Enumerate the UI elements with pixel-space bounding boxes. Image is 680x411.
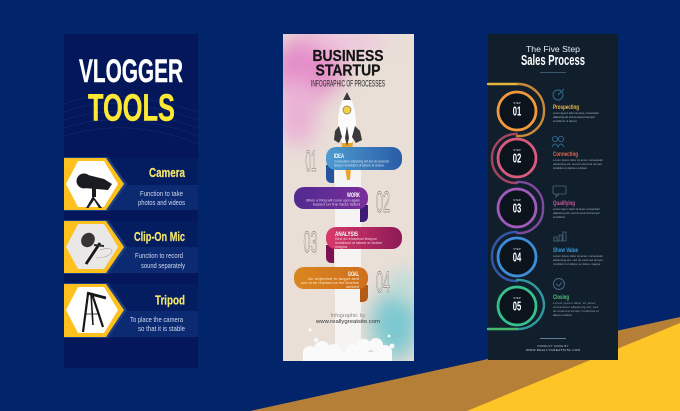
text: connecting: adipiscing elit, sed do eiusmod tempor (553, 162, 602, 166)
panel: vlogger tools (64, 34, 198, 368)
row: clip-on mic: Clip-On Mic (134, 230, 185, 244)
text: qualifying: incididunt (553, 215, 565, 219)
heading: business startup: STARTUP (316, 62, 380, 80)
step 03: analysis: incididunt ut labore et dolore (335, 241, 382, 245)
row: camera: Camera (149, 166, 186, 180)
icon: microphone (78, 230, 112, 264)
step 02: work (294, 187, 368, 222)
icon: target (553, 89, 564, 100)
panel: business startup: 01 (306, 145, 316, 178)
step 04: goal: one to be reached on the timeline (301, 281, 359, 285)
step 01 circle: 01 (513, 104, 521, 118)
panel: business startup: 02 (376, 186, 390, 219)
step 04: goal (294, 267, 368, 302)
row: clip-on mic (64, 220, 198, 274)
row: tripod (64, 283, 198, 338)
step 02: work: When a thing will come upon again (306, 198, 360, 202)
step 03: analysis: magna (335, 245, 347, 249)
heading: sales process: The Five Step (526, 45, 581, 54)
step 02 circle: 02 (513, 152, 521, 166)
text: qualifying: Qualifying (553, 200, 575, 207)
text: show value: Lorem ipsum dolor sit amet, consectetur (553, 254, 603, 258)
heading: sales process (521, 45, 585, 73)
text: prospecting (553, 104, 599, 123)
step 04: goal: achieved (346, 285, 359, 289)
step 02: work: WORK (347, 193, 360, 199)
step 05 circle (498, 287, 536, 325)
footer: website: WWW.REALLYGREATSITE.COM (526, 348, 580, 352)
panel: business startup (283, 34, 414, 361)
row: tripod: so that it is stable (138, 324, 185, 333)
step 03 circle: 03 (513, 202, 521, 216)
step 03: analysis: ANALYSIS (335, 232, 358, 238)
icon: rocket (334, 92, 362, 180)
step 05 circle: 05 (513, 300, 521, 314)
watercolor washes (283, 34, 414, 361)
row: camera: Function to take (140, 189, 183, 198)
step 01: idea: tempor incididunt ut labore et dolore (334, 164, 384, 168)
step 02 circle: STEP (513, 148, 521, 152)
clouds (303, 328, 394, 361)
heading: sales process: Sales Process (521, 53, 585, 69)
icon: speech bubble (553, 186, 566, 197)
row: camera: photos and videos (138, 198, 185, 207)
heading: vlogger tools: VLOGGER (79, 53, 183, 89)
text: show value: incididunt ut labore et dolore magna (553, 262, 600, 266)
footer: website (526, 338, 580, 352)
step 01: idea: Consectetur adipiscing elit sed do eiusmod (334, 160, 389, 164)
footer: website: PRODUCT GUIDE BY (538, 344, 569, 348)
row: tripod: To place the camera (130, 315, 183, 324)
credit text (315, 313, 381, 325)
text: connecting: Lorem ipsum dolor sit amet, consectetur (553, 158, 603, 162)
step 05 circle: STEP (513, 296, 521, 300)
text: qualifying (553, 200, 600, 219)
heading: business startup (311, 48, 385, 90)
text: qualifying: Lorem ipsum dolor sit amet, consectetur (553, 207, 600, 211)
text: prospecting: incididunt ut labore (553, 119, 577, 123)
text: closing: Closing (553, 294, 569, 301)
step 04: goal: GOAL (348, 272, 359, 278)
step 03: analysis (326, 227, 402, 263)
panel: business startup: 03 (304, 226, 318, 259)
row: camera (64, 157, 198, 211)
step 04: goal: An objective to target and (308, 277, 359, 281)
text: prospecting: Prospecting (553, 104, 579, 111)
panel: business startup: 04 (376, 266, 390, 299)
heading: business startup: INFOGRAPHIC OF PROCESSES (311, 78, 385, 90)
step 03 circle (498, 189, 536, 227)
text: show value: adipiscing elit, sed do eiusmod tempor (553, 258, 603, 262)
step 01 circle (498, 92, 536, 130)
brown diagonal band (250, 317, 680, 411)
icon: bar chart (553, 232, 566, 241)
heading: business startup: BUSINESS (312, 48, 384, 65)
step 04 circle (498, 238, 536, 276)
credit text: www.reallygreatsite.com (315, 319, 381, 325)
text: show value: Show Value (553, 247, 578, 254)
yellow diagonal band (467, 323, 680, 411)
text: connecting (553, 151, 603, 170)
step 01: idea: IDEA (334, 154, 344, 160)
text: closing: Lorem ipsum dolor sit amet, (553, 301, 596, 305)
row: clip-on mic: Function to record (135, 251, 183, 260)
step 04 circle: 04 (513, 250, 521, 264)
text: closing: do eiusmod tempor incididunt ut (553, 309, 599, 313)
text: connecting: Connecting (553, 151, 578, 158)
text: show value (553, 247, 603, 266)
icon: clock (554, 278, 564, 290)
text: qualifying: adipiscing elit, sed do eiusmod tempor (553, 211, 600, 215)
heading: vlogger tools (79, 53, 183, 130)
row: tripod: Tripod (155, 294, 185, 308)
icon: camera (76, 174, 112, 208)
text: connecting: incididunt ut labore et dolore (553, 166, 587, 170)
step 04 circle: STEP (513, 247, 521, 251)
text: closing: consectetur adipiscing elit, sed (553, 305, 598, 309)
icon: tripod (83, 293, 106, 332)
step 03 circle: STEP (513, 198, 521, 202)
row: clip-on mic: sound separately (141, 261, 185, 270)
text: closing (553, 294, 599, 317)
step 02: work: based on the facts listed (313, 202, 360, 206)
text: prospecting: Lorem ipsum dolor sit amet, consectetur (553, 111, 599, 115)
text: prospecting: adipiscing elit, sed do eiusmod tempor (553, 115, 595, 119)
panel: sales process (488, 34, 618, 360)
step 02 circle (498, 139, 536, 177)
step 01 circle: STEP (513, 101, 521, 105)
step 03: analysis: Sed do eiusmod tempor (335, 237, 378, 241)
step 01: idea (326, 147, 402, 183)
credit text: Infographic by (330, 313, 366, 319)
heading: vlogger tools: TOOLS (88, 88, 175, 130)
icon: people (552, 136, 564, 147)
connecting ribbon (488, 84, 544, 329)
text: closing: labore et dolore (553, 313, 572, 317)
